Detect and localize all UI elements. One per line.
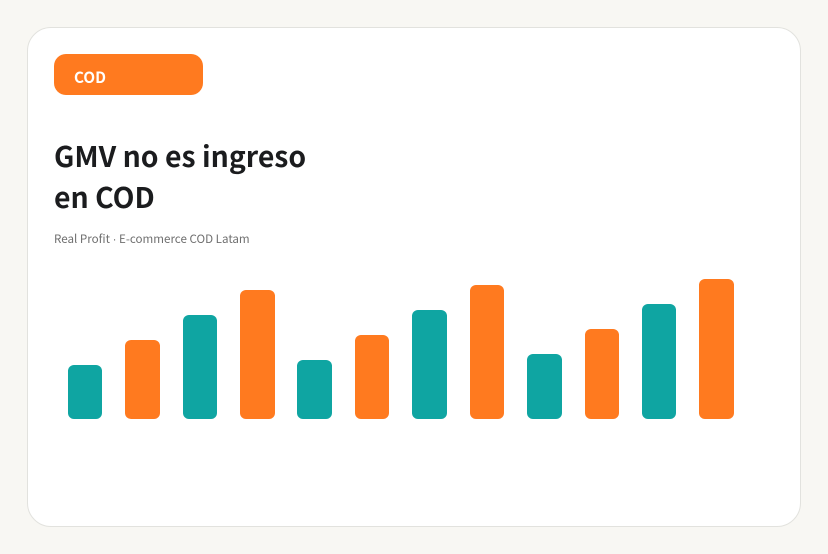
bar 3 — [182, 315, 217, 419]
bar chart — [68, 279, 734, 419]
title: GMV no es ingreso — [54, 135, 306, 176]
badge label: COD — [74, 66, 106, 88]
badge: COD — [54, 54, 203, 95]
subtitle: Real Profit · E-commerce COD Latam — [54, 231, 250, 247]
bar 6 — [354, 334, 389, 419]
bar 12 — [699, 279, 734, 419]
bar 9 — [527, 354, 562, 419]
bar 5 — [297, 360, 332, 419]
bar 2 — [125, 340, 160, 419]
title — [54, 135, 306, 217]
bar 7 — [412, 310, 446, 419]
bar 11 — [642, 304, 676, 419]
bar 1 — [68, 365, 102, 419]
title: en COD — [54, 176, 155, 217]
bar 8 — [470, 284, 504, 419]
bar 10 — [584, 329, 619, 419]
bar 4 — [240, 290, 274, 419]
